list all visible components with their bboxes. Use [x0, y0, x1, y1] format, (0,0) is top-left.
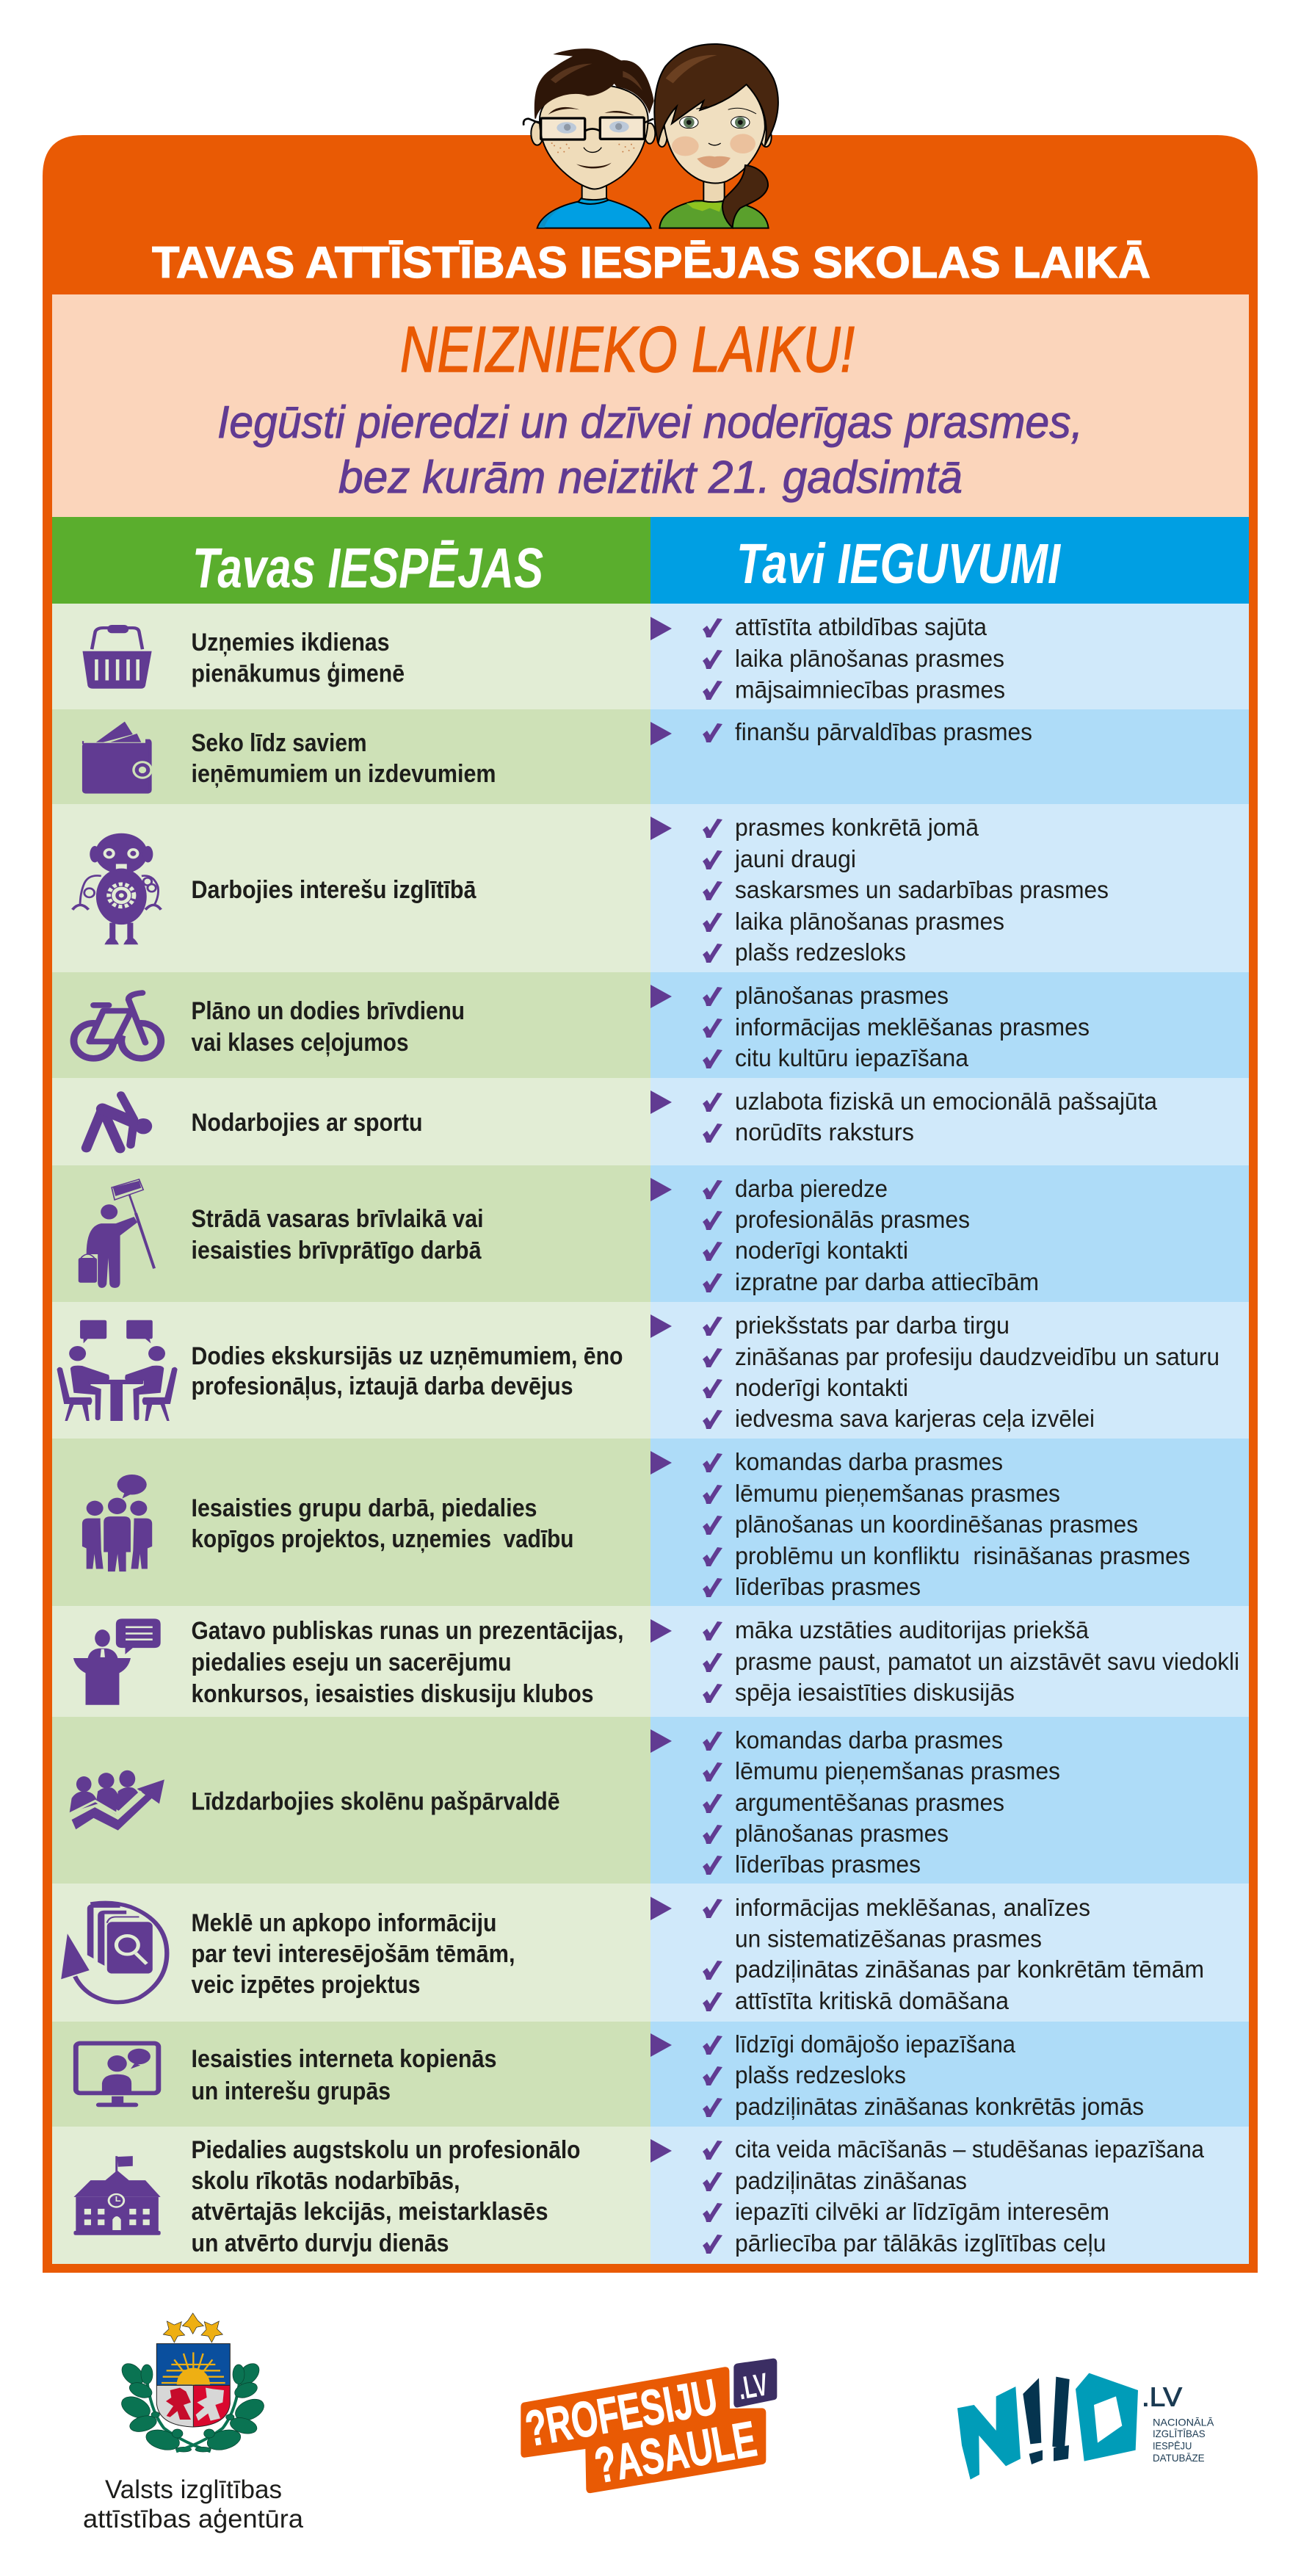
icon: group of people	[82, 1475, 152, 1571]
benefits: spēja iesaistīties diskusijās	[735, 1679, 1015, 1706]
benefits: komandas darba prasmes	[735, 1726, 1003, 1754]
row 4	[52, 972, 1249, 1078]
heading: neiznieko laiku: NEIZNIEKO LAIKU!	[400, 313, 855, 386]
benefits	[650, 1175, 1039, 1295]
benefits: prasmes konkrētā jomā	[735, 814, 979, 841]
text: option: vai klases ceļojumos	[191, 1029, 408, 1057]
text: option: veic izpētes projektus	[191, 1971, 420, 1999]
text: option: Meklē un apkopo informāciju	[191, 1909, 496, 1937]
text: option	[191, 729, 496, 788]
text: option: Nodarbojies ar sportu	[191, 1109, 423, 1137]
benefits: laika plānošanas prasmes	[735, 645, 1004, 672]
row 10	[52, 1717, 1249, 1884]
benefits	[650, 1088, 1158, 1146]
benefits: citu kultūru iepazīšana	[735, 1044, 969, 1071]
benefits	[650, 2135, 1205, 2257]
logo: NIID: DATUBĀZE	[1153, 2452, 1205, 2464]
logo: NIID: NACIONĀLĀ	[1153, 2416, 1214, 2428]
text: option: kopīgos projektos, uzņemies vadību	[191, 1525, 574, 1553]
row 3	[52, 804, 1249, 972]
oak branches	[117, 2359, 267, 2453]
benefits: uzlabota fiziskā un emocionālā pašsajūta	[735, 1088, 1158, 1115]
benefits: prasme paust, pamatot un aizstāvēt savu viedokli	[735, 1648, 1239, 1675]
panel: intro	[52, 294, 1249, 517]
row 8	[52, 1439, 1249, 1607]
benefits: argumentēšanas prasmes	[735, 1789, 1004, 1816]
text: option: Līdzdarbojies skolēnu pašpārvaldē	[191, 1787, 559, 1815]
row 1	[52, 604, 1249, 709]
icon: books and magnifier	[61, 1903, 167, 2002]
subheading line 2: bez kurām neiztikt 21. gadsimtā	[338, 452, 963, 503]
benefits: plānošanas prasmes	[735, 982, 949, 1009]
benefits: jauni draugi	[734, 845, 856, 872]
benefits	[650, 1616, 1239, 1706]
benefits: plānošanas un koordinēšanas prasmes	[735, 1510, 1138, 1538]
text: option	[191, 997, 465, 1057]
text: option	[191, 1342, 623, 1400]
text: option: un interešu grupās	[191, 2077, 391, 2105]
benefits: māka uzstāties auditorijas priekšā	[735, 1616, 1090, 1643]
icon: robot	[73, 833, 161, 944]
benefits: līdzīgi domājošo iepazīšana	[735, 2030, 1016, 2058]
benefits: pārliecība par tālākās izglītības ceļu	[735, 2229, 1106, 2257]
text: agency name: Valsts izglītības	[105, 2475, 282, 2504]
benefits: norūdīts raksturs	[735, 1118, 914, 1146]
benefits: plašs redzesloks	[735, 938, 906, 966]
benefits: informācijas meklēšanas, analīzes	[735, 1894, 1090, 1921]
benefits: informācijas meklēšanas prasmes	[735, 1013, 1090, 1041]
text: agency name: attīstības aģentūra	[83, 2505, 304, 2533]
row 13	[52, 2127, 1249, 2264]
benefits: attīstīta atbildības sajūta	[735, 613, 987, 640]
text: option	[191, 2136, 580, 2257]
text: agency name	[83, 2475, 304, 2533]
icon: sport figure	[87, 1095, 152, 1148]
row 12	[52, 2022, 1249, 2127]
icon: meeting at table	[57, 1320, 178, 1421]
logo: Profesiju pasaule: .LV	[736, 2367, 771, 2407]
row 6	[52, 1165, 1249, 1302]
benefits: padziļinātas zināšanas konkrētās jomās	[735, 2093, 1144, 2120]
benefits: izpratne par darba attiecībām	[735, 1268, 1039, 1295]
icon: monitor with person	[76, 2044, 159, 2107]
benefits: plānošanas prasmes	[735, 1820, 949, 1847]
text: option: profesionāļus, iztaujā darba devējus	[191, 1372, 573, 1400]
text: option: Seko līdz saviem	[191, 729, 367, 757]
boy	[523, 48, 655, 228]
benefits: finanšu pārvaldības prasmes	[735, 718, 1032, 745]
benefits: iedvesma sava karjeras ceļa izvēlei	[735, 1405, 1095, 1432]
benefits: darba pieredze	[735, 1175, 888, 1202]
subheading line 1: Iegūsti pieredzi un dzīvei noderīgas prasmes,	[217, 397, 1083, 448]
column header: tavi ieguvumi	[650, 517, 1249, 604]
logo: NIID: IZGLĪTĪBAS	[1153, 2428, 1206, 2439]
title: TAVAS ATTĪSTĪBAS IESPĒJAS SKOLAS LAIKĀ	[152, 238, 1150, 287]
benefits: attīstīta kritiskā domāšana	[735, 1987, 1010, 2014]
text: option	[191, 1909, 515, 1999]
logo: NIID: IESPĒJU	[1153, 2439, 1192, 2451]
benefits: zināšanas par profesiju daudzveidību un saturu	[735, 1343, 1220, 1370]
logo: Profesiju pasaule	[521, 2359, 777, 2494]
text: option: atvērtajās lekcijās, meistarklasēs	[191, 2198, 548, 2226]
icon: wallet	[82, 722, 153, 794]
text: option	[191, 1494, 574, 1553]
benefits: padziļinātas zināšanas par konkrētām tēmām	[735, 1955, 1204, 1983]
benefits	[650, 1311, 1220, 1432]
orange frame	[43, 135, 1258, 2273]
text: option: ieņēmumiem un izdevumiem	[191, 760, 496, 788]
logo: Latvian coat of arms	[117, 2313, 267, 2453]
benefits: cita veida mācīšanās – studēšanas iepazīšana	[735, 2135, 1205, 2163]
text: option: Darbojies interešu izglītībā	[191, 876, 476, 904]
benefits	[650, 1894, 1204, 2014]
benefits	[650, 613, 1005, 703]
icon: painter	[79, 1179, 154, 1288]
icon: school building	[73, 2156, 161, 2235]
stars	[163, 2313, 222, 2342]
lion and griffin	[166, 2388, 191, 2420]
logo: Profesiju pasaule: ?ROFESIJU	[521, 2369, 722, 2457]
benefits: plašs redzesloks	[735, 2061, 906, 2088]
benefits: laika plānošanas prasmes	[735, 908, 1004, 935]
icon: speaker at lectern	[73, 1618, 161, 1705]
icon: basket	[83, 625, 152, 689]
benefits	[650, 982, 1090, 1071]
benefits: padziļinātas zināšanas	[735, 2167, 967, 2194]
text: option: Piedalies augstskolu un profesionālo	[191, 2136, 580, 2164]
row 11	[52, 1884, 1249, 2022]
text: option: konkursos, iesaisties diskusiju klubos	[191, 1680, 593, 1708]
text: option: Plāno un dodies brīvdienu	[191, 997, 465, 1025]
text: option: Iesaisties interneta kopienās	[191, 2045, 496, 2073]
benefits: priekšstats par darba tirgu	[735, 1311, 1010, 1339]
illustration: boy and girl	[523, 44, 778, 228]
benefits: noderīgi kontakti	[735, 1237, 908, 1264]
benefits	[650, 2030, 1144, 2120]
benefits	[650, 814, 1109, 966]
row 2	[52, 709, 1249, 804]
benefits	[650, 1448, 1190, 1600]
benefits: iepazīti cilvēki ar līdzīgām interesēm	[735, 2198, 1109, 2225]
text: option: Dodies ekskursijās uz uzņēmumiem, ēno	[191, 1342, 623, 1370]
text: option	[191, 2045, 496, 2105]
benefits: profesionālās prasmes	[735, 1206, 970, 1233]
text: option: Strādā vasaras brīvlaikā vai	[191, 1205, 483, 1233]
benefits: un sistematizēšanas prasmes	[735, 1925, 1042, 1952]
text: option: iesaisties brīvprātīgo darbā	[191, 1237, 482, 1265]
column header: tavas iespējas: Tavas IESPĒJAS	[192, 537, 543, 600]
logo: Profesiju pasaule: ?ASAULE	[590, 2411, 761, 2494]
girl	[654, 44, 778, 228]
text: option: piedalies eseju un sacerējumu	[191, 1649, 511, 1676]
text: option: Iesaisties grupu darbā, piedalies	[191, 1494, 537, 1522]
column header: tavi ieguvumi: Tavi IEGUVUMI	[736, 532, 1061, 596]
benefits: līderības prasmes	[735, 1573, 921, 1600]
icon: bicycle	[73, 993, 163, 1060]
text: option	[191, 1205, 483, 1265]
text: option: skolu rīkotās nodarbībās,	[191, 2167, 460, 2195]
text: option	[191, 1617, 624, 1708]
benefits: lēmumu pieņemšanas prasmes	[735, 1757, 1060, 1784]
text: option	[191, 629, 405, 687]
benefits: noderīgi kontakti	[735, 1374, 908, 1401]
logo: NIID: .LV	[1142, 2382, 1182, 2412]
logo: NIID	[957, 2373, 1214, 2480]
benefits: problēmu un konfliktu risināšanas prasmes	[735, 1542, 1190, 1569]
text: option: un atvērto durvju dienās	[191, 2229, 449, 2257]
row 5	[52, 1078, 1249, 1165]
row 7	[52, 1302, 1249, 1439]
icon: people and rising arrow	[70, 1770, 164, 1831]
row 9	[52, 1606, 1249, 1717]
benefits: mājsaimniecības prasmes	[735, 676, 1005, 703]
benefits: lēmumu pieņemšanas prasmes	[735, 1480, 1060, 1507]
text: option: Gatavo publiskas runas un prezentācijas,	[191, 1617, 624, 1645]
benefits	[650, 1726, 1060, 1878]
benefits: līderības prasmes	[735, 1850, 921, 1878]
text: option: Uzņemies ikdienas	[191, 629, 389, 656]
text: option: par tevi interesējošām tēmām,	[191, 1940, 515, 1968]
benefits: saskarsmes un sadarbības prasmes	[735, 876, 1109, 903]
benefits: komandas darba prasmes	[735, 1448, 1003, 1475]
text: option: pienākumus ģimenē	[191, 659, 405, 687]
column header: tavas iespējas	[52, 517, 650, 604]
shield	[156, 2344, 230, 2385]
